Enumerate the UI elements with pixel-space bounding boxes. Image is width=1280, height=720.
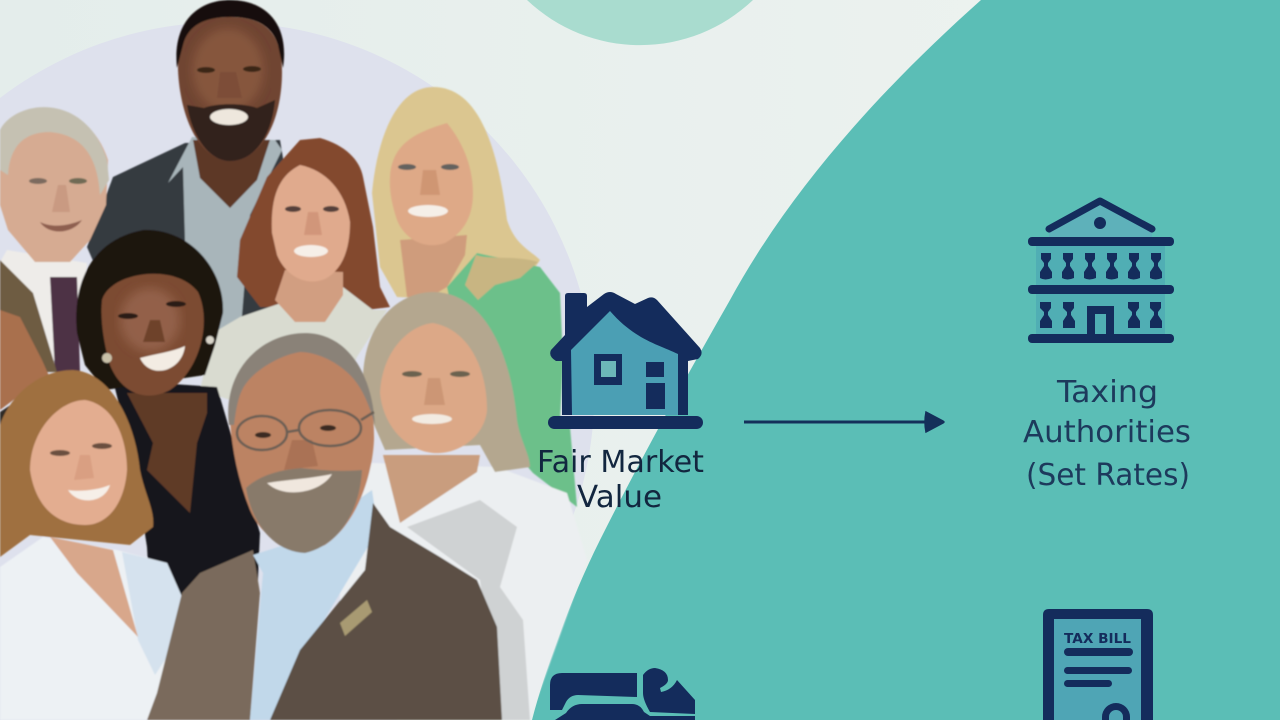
arrow bbox=[744, 412, 944, 432]
icon: eyeglasses bbox=[237, 410, 374, 450]
lilac circle behind people bbox=[0, 22, 594, 720]
icon: tax document bbox=[1043, 609, 1153, 720]
person: woman with dark curly hair bbox=[76, 230, 260, 720]
person: brunette woman bbox=[200, 138, 390, 400]
person: man at top bbox=[87, 0, 290, 370]
document heading: TAX BILL bbox=[1064, 632, 1131, 647]
person: blonde woman bbox=[372, 87, 577, 507]
label: Taxing Authorities (Set Rates) bbox=[1023, 375, 1191, 493]
person: bearded man in front bbox=[147, 333, 502, 720]
label: Taxing Authorities (Set Rates): Authorities bbox=[1023, 415, 1191, 450]
person: woman lower left bbox=[0, 370, 182, 720]
label: Taxing Authorities (Set Rates): (Set Rates) bbox=[1026, 458, 1190, 493]
columns bbox=[1040, 253, 1162, 336]
label: Fair Market Value: Value bbox=[577, 480, 662, 515]
seal bbox=[1102, 703, 1130, 720]
icon: government building bbox=[1028, 201, 1174, 343]
person: older man left bbox=[0, 107, 109, 372]
decorative top circle bbox=[527, 0, 753, 45]
label: Taxing Authorities (Set Rates): Taxing bbox=[1056, 375, 1158, 410]
label: Fair Market Value bbox=[537, 445, 704, 515]
person: woman with grey hair bbox=[340, 292, 587, 720]
teal curved panel bbox=[532, 0, 1280, 720]
person: partial face far left bbox=[0, 310, 56, 425]
icon: partial shape at bottom bbox=[550, 668, 695, 720]
photo: group of people bbox=[0, 0, 587, 720]
label: Fair Market Value: Fair Market bbox=[537, 445, 704, 480]
icon: house bbox=[548, 292, 703, 429]
